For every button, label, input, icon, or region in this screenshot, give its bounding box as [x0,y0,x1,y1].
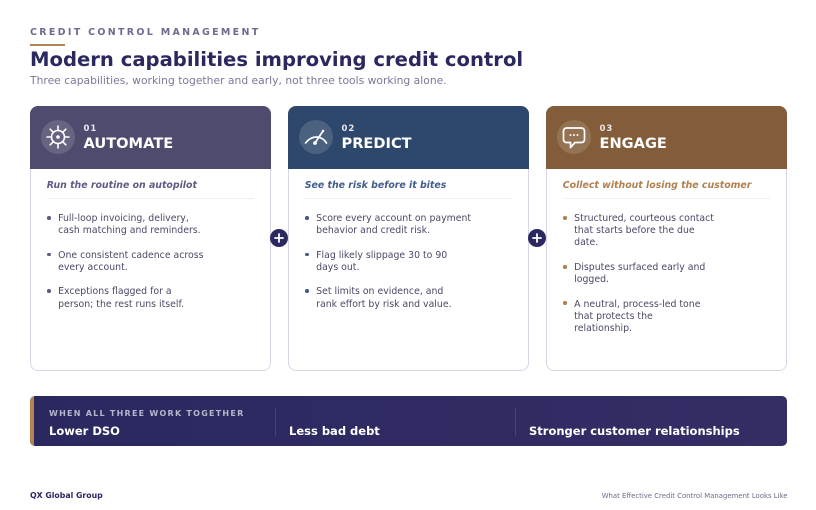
icon: plus connector 2 [528,229,546,247]
bullet text: logged. [574,274,609,285]
panel: predict [288,106,529,371]
bullet text [574,299,700,334]
bullet text [316,213,471,236]
bullet text: every account. [58,262,128,273]
bullet dot [305,216,309,220]
bullet dot [563,216,567,220]
bullet text: that protects the [574,311,653,322]
bullet text [58,213,201,236]
automate header [30,106,271,168]
bullet text: A neutral, process-led tone [574,299,700,310]
outcome: stronger customer relationships: Stronger customer relationships [529,424,740,438]
predict name: PREDICT [342,135,412,152]
bullet dot [563,265,567,269]
bullet text: Disputes surfaced early and [574,262,705,273]
outcome: less bad debt: Less bad debt [289,424,380,438]
bullet text: Exceptions flagged for a [58,286,172,297]
bullet text: rank effort by risk and value. [316,299,452,310]
automate tagline: Run the routine on autopilot [47,180,197,191]
bullet text: cash matching and reminders. [58,225,201,236]
bullet text: relationship. [574,323,632,334]
footer brand: QX Global Group [30,490,103,500]
accent rule [30,44,65,46]
automate name: AUTOMATE [84,135,173,152]
bullet text: Set limits on evidence, and [316,286,443,297]
outcome: lower DSO: Lower DSO [49,424,120,438]
bullet text: One consistent cadence across [58,250,203,261]
banner label: WHEN ALL THREE WORK TOGETHER [49,408,244,418]
panel: automate [30,106,271,371]
bullet text [58,250,203,273]
bullet text: that starts before the due [574,225,695,236]
engage name: ENGAGE [600,135,667,152]
panel: engage [546,106,787,371]
banner accent bar [30,396,34,446]
engage number: 03 [600,124,613,134]
bullet dot [305,289,309,293]
bullet dot [47,289,51,293]
bullet text [58,286,184,310]
predict number: 02 [342,124,355,134]
icon: speech bubble [557,120,591,154]
predict header [288,106,529,168]
eyebrow label: CREDIT CONTROL MANAGEMENT [30,27,260,38]
bullet text [316,250,447,273]
predict tagline: See the risk before it bites [305,180,446,191]
icon: gauge [299,120,333,154]
icon: plus connector 1 [270,229,288,247]
bullet text: date. [574,237,598,248]
bullet dot [305,253,309,256]
bullet text: Flag likely slippage 30 to 90 [316,250,447,261]
bullet text: Structured, courteous contact [574,213,714,224]
bullet text: Score every account on payment [316,213,471,224]
bullet text: days out. [316,262,359,273]
bullet text [316,286,452,310]
bullet dot [47,216,51,220]
bullet text [574,262,705,285]
bullet text: person; the rest runs itself. [58,299,184,310]
bullet text [574,213,714,248]
bullet dot [47,253,51,256]
bullet text: behavior and credit risk. [316,225,430,236]
engage header [546,106,787,168]
automate number: 01 [84,124,97,134]
subtitle: Three capabilities, working together and early, not three tools working alone. [30,74,447,87]
outcome banner [30,396,787,446]
footer title: What Effective Credit Control Management Looks Like [602,492,788,500]
engage tagline: Collect without losing the customer [563,180,751,191]
bullet text: Full-loop invoicing, delivery, [58,213,189,224]
icon: gear [41,120,75,154]
bullet dot [563,301,567,305]
title: Modern capabilities improving credit control [30,48,523,71]
